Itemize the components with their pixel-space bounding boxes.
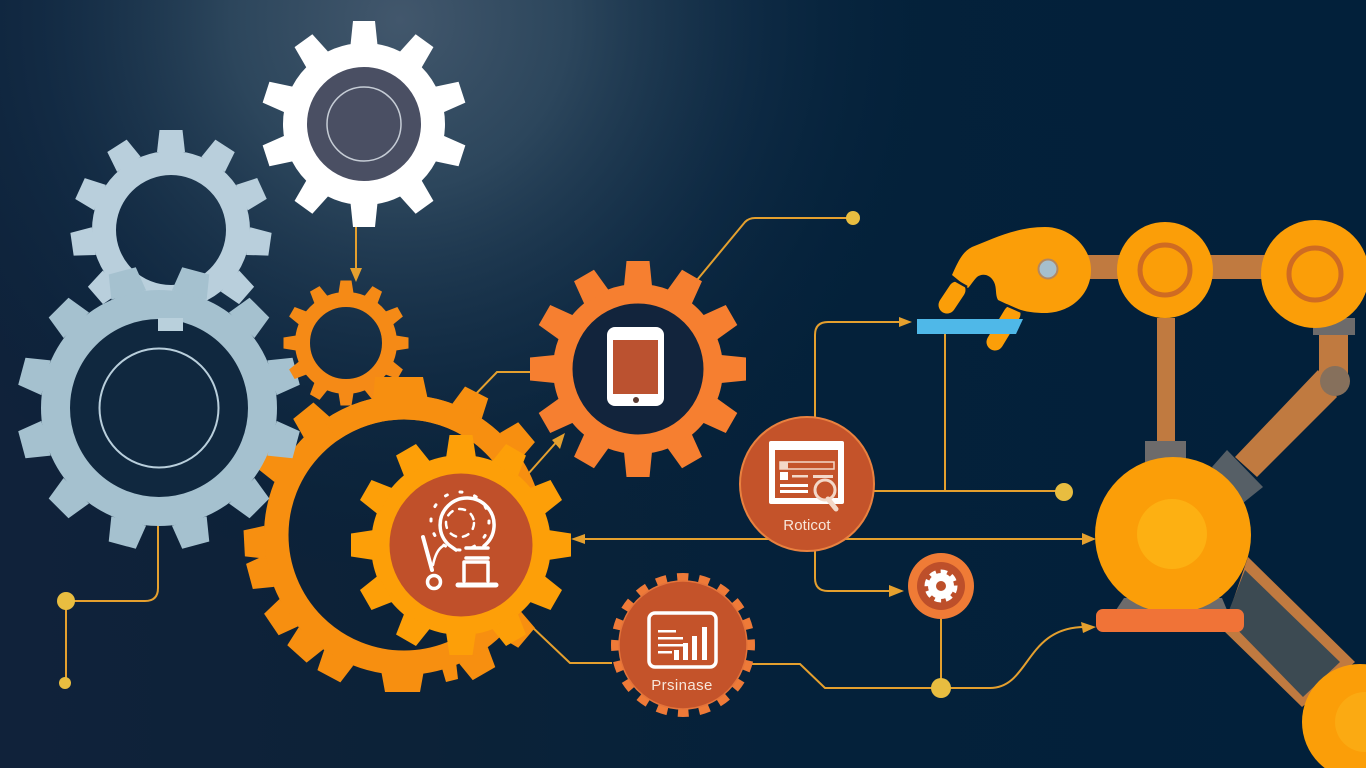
label: Roticot: Roticot	[783, 517, 831, 534]
gear: pale blue small	[70, 130, 272, 330]
node dots	[57, 211, 1073, 698]
robot base plate	[1096, 609, 1244, 632]
joint: middle	[1117, 222, 1213, 318]
joint: lower right	[1302, 664, 1366, 768]
joint: right	[1261, 220, 1366, 328]
blue plate	[917, 319, 1023, 334]
gear: large orange ring	[243, 385, 537, 692]
arm: connector blocks	[1116, 318, 1355, 610]
node: Roticot	[740, 417, 874, 551]
gear: white with inner ring	[262, 21, 466, 227]
icon: gear on machine	[423, 492, 496, 588]
icon: tablet	[607, 327, 664, 406]
icon: bar chart panel	[649, 613, 716, 667]
arm: upper bars	[1088, 255, 1348, 477]
arm: lower diagonal	[1223, 557, 1355, 707]
gear: pale blue large	[17, 266, 301, 550]
gear: small orange	[284, 280, 408, 406]
robot arm	[917, 220, 1366, 768]
robot hand	[947, 227, 1091, 342]
label: Prsinase: Prsinase	[651, 677, 713, 694]
node: small gear	[908, 553, 974, 619]
icon: browser window with magnifier	[769, 441, 844, 509]
connector lines	[66, 218, 1085, 688]
gear: inner amber with robot icon	[351, 435, 571, 655]
gear: orange with tablet icon	[530, 261, 746, 477]
gear: large orange ring top segment	[226, 357, 582, 713]
arrowheads	[350, 268, 1096, 633]
robot base joint	[1095, 457, 1251, 613]
icon: white cog	[927, 572, 955, 600]
node: Prsinase gear	[616, 578, 750, 712]
